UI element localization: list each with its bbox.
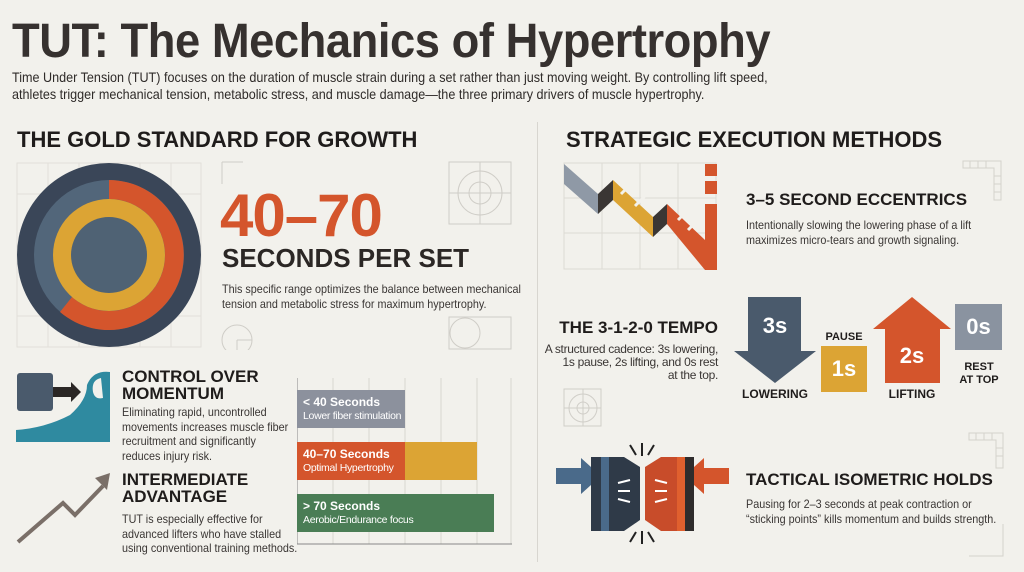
- bar: 40-70: Optimal Hypertrophy: [303, 462, 394, 474]
- bar: <40: < 40 Seconds: [303, 395, 380, 409]
- icon: rising arrow: [16, 473, 110, 544]
- heading control: [122, 367, 259, 403]
- bar: >70: [297, 494, 494, 532]
- bar: 40-70: [297, 442, 477, 480]
- text intermediate: using conventional training methods.: [122, 541, 297, 555]
- decor corners: [968, 432, 1004, 556]
- text isometric: [746, 497, 996, 526]
- box 1s: [821, 346, 867, 392]
- heading control: MOMENTUM: [122, 384, 224, 403]
- subtitle: [12, 69, 768, 102]
- decor target: [564, 388, 602, 426]
- text control: [122, 405, 288, 462]
- donut chart: [16, 162, 202, 348]
- icon: eccentric chart: [564, 162, 717, 270]
- text isometric: “sticking points” kills momentum and builds strength.: [746, 512, 996, 526]
- label rest: REST: [964, 361, 994, 373]
- label rest: [959, 361, 999, 386]
- label lifting: LIFTING: [889, 387, 935, 401]
- desc gold: tension and metabolic stress for maximum hypertrophy.: [222, 296, 487, 310]
- text eccentrics: maximizes micro-tears and growth signaling.: [746, 232, 959, 246]
- decor corner: [962, 160, 1002, 200]
- text control: recruitment and significantly: [122, 434, 256, 448]
- text tempo: [544, 342, 718, 382]
- bar chart: [297, 378, 512, 544]
- decor icons: [222, 162, 512, 350]
- heading intermediate: ADVANTAGE: [122, 487, 227, 506]
- bar: >70: Aerobic/Endurance focus: [303, 514, 413, 526]
- text intermediate: advanced lifters who have stalled: [122, 526, 281, 540]
- heading isometric: TACTICAL ISOMETRIC HOLDS: [746, 470, 993, 489]
- text tempo: 1s pause, 2s lifting, and 0s rest: [562, 355, 718, 369]
- text intermediate: TUT is especially effective for: [122, 512, 263, 526]
- label lowering: LOWERING: [742, 387, 808, 401]
- text isometric: Pausing for 2–3 seconds at peak contraction or: [746, 497, 972, 511]
- heading intermediate: [122, 470, 248, 506]
- text control: Eliminating rapid, uncontrolled: [122, 405, 267, 419]
- icon: isometric press: [556, 443, 729, 544]
- heading: gold standard: THE GOLD STANDARD FOR GROWTH: [17, 127, 417, 152]
- box 0s: [955, 304, 1002, 350]
- text eccentrics: [746, 218, 972, 246]
- arrow: lowering 3s: [734, 297, 816, 383]
- bar: <40: [297, 390, 405, 428]
- bar: <40: Lower fiber stimulation: [303, 410, 401, 422]
- text control: movements increases muscle fiber: [122, 420, 288, 434]
- heading control: CONTROL OVER: [122, 367, 259, 386]
- heading intermediate: INTERMEDIATE: [122, 470, 248, 489]
- arrow: lowering 3s: 3s: [763, 313, 787, 338]
- arrow: lifting 2s: 2s: [900, 343, 924, 368]
- bar: 40-70: 40–70 Seconds: [303, 447, 390, 461]
- desc gold: This specific range optimizes the balance between mechanical: [222, 282, 521, 296]
- seconds per set: SECONDS PER SET: [222, 243, 469, 273]
- arrow: lifting 2s: [873, 297, 951, 383]
- desc gold: [222, 282, 521, 310]
- icon: wave: [16, 372, 110, 442]
- heading tempo: THE 3-1-2-0 TEMPO: [559, 318, 718, 337]
- text control: reduces injury risk.: [122, 448, 212, 462]
- subtitle: Time Under Tension (TUT) focuses on the duration of muscle strain during a set rather than just moving weight. By controlling lift speed,: [12, 69, 768, 85]
- heading: strategic: STRATEGIC EXECUTION METHODS: [566, 127, 942, 152]
- text eccentrics: Intentionally slowing the lowering phase of a lift: [746, 218, 971, 232]
- big number: 40–70: [220, 182, 382, 249]
- box 1s: 1s: [832, 356, 856, 381]
- bar: >70: > 70 Seconds: [303, 499, 380, 513]
- heading eccentrics: 3–5 SECOND ECCENTRICS: [746, 190, 967, 209]
- subtitle: athletes trigger mechanical tension, metabolic stress, and muscle damage—the three primary drivers of muscle hypertrophy.: [12, 86, 704, 102]
- title: TUT: The Mechanics of Hypertrophy: [12, 15, 770, 68]
- text intermediate: [122, 512, 297, 555]
- label pause: PAUSE: [825, 331, 863, 343]
- box 0s: 0s: [966, 314, 991, 339]
- label rest: AT TOP: [959, 374, 999, 386]
- text tempo: at the top.: [668, 368, 718, 382]
- text tempo: A structured cadence: 3s lowering,: [545, 342, 718, 356]
- tempo diagram: [734, 297, 1002, 401]
